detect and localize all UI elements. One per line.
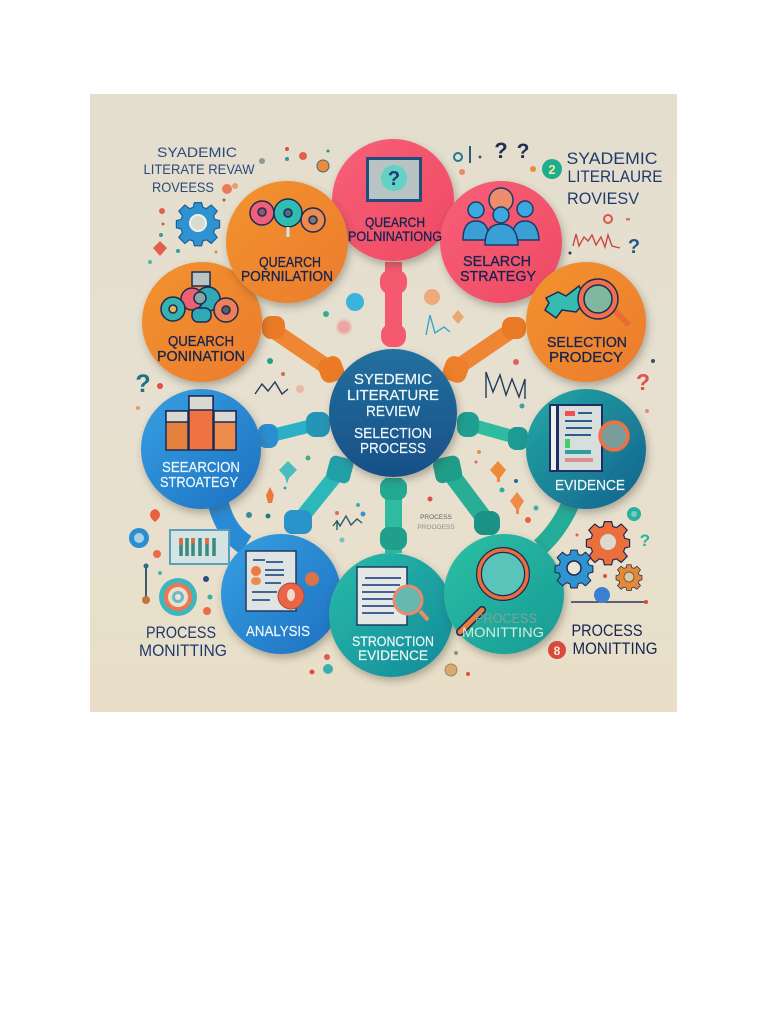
icon: question marks: ? xyxy=(640,531,650,550)
connector: upper right orange xyxy=(440,317,526,385)
label: SELECTION xyxy=(547,334,627,351)
heading: top left: SYADEMIC xyxy=(157,144,237,160)
scattered dots and markers xyxy=(136,146,655,676)
icon: team of people xyxy=(463,188,539,245)
label: STROATEGY xyxy=(160,475,238,491)
heading: top left xyxy=(144,144,255,195)
connector: lower left teal xyxy=(284,454,355,534)
heading: top left: ROVEESS xyxy=(152,179,214,195)
heading: process monitoring left xyxy=(139,624,227,660)
label xyxy=(460,253,536,285)
heading: process monitoring right: PROCESS xyxy=(572,622,642,640)
icon: question marks: ? xyxy=(628,236,640,258)
label: query formulation pink xyxy=(348,214,442,244)
caption: process small xyxy=(417,514,455,531)
icon: magnifying glass xyxy=(460,550,527,632)
label: PRODECY xyxy=(549,349,623,366)
label: STRATEGY xyxy=(460,268,536,285)
hub title xyxy=(347,372,439,457)
badge: number 8: 8 xyxy=(554,644,561,658)
heading: top right: SYADEMIC xyxy=(566,150,658,168)
icon: widget panel left xyxy=(170,530,229,564)
node: query formulation pink xyxy=(332,139,454,261)
label: SELARCH xyxy=(463,253,531,270)
label xyxy=(157,333,245,365)
caption: process small: PROOOESS xyxy=(417,524,455,531)
badge: number 2: 2 xyxy=(548,162,556,177)
icon: document with badge xyxy=(246,551,319,611)
label: EVIDENCE xyxy=(358,648,428,663)
hub title: SELECTION xyxy=(354,426,432,442)
node: search strategy pink xyxy=(440,181,562,303)
hub title: PROCESS xyxy=(360,441,426,457)
node: analysis blue xyxy=(221,534,341,654)
connector: teal arc to evidence xyxy=(540,505,570,547)
heading: top right: LITERLAURE xyxy=(568,168,662,186)
heading: top left: LITERATE REVAW xyxy=(144,161,255,177)
icon: screen with question mark: ? xyxy=(388,168,400,190)
label: PONINATION xyxy=(157,348,245,365)
icon: report with magnifier xyxy=(549,404,628,472)
heading: top right xyxy=(566,150,662,208)
connector: left blue xyxy=(258,412,330,448)
badge: number 8 xyxy=(548,641,566,659)
heading: top right: ROVIESV xyxy=(567,190,639,208)
node: evidence teal xyxy=(526,389,646,509)
central hub xyxy=(329,349,457,477)
connector: lower right teal xyxy=(432,454,500,535)
badge: number 2 xyxy=(542,159,562,179)
icon: hub of gears xyxy=(161,272,238,322)
label xyxy=(547,334,627,366)
label: query formulation pink: QUEARCH xyxy=(365,214,425,230)
hub title: REVIEW xyxy=(366,404,420,420)
connector: down teal xyxy=(380,478,407,553)
label: QUEARCH xyxy=(168,333,234,350)
node: search formulation orange xyxy=(226,181,348,303)
node: process monitoring teal xyxy=(444,534,564,654)
heading: process monitoring right xyxy=(572,622,658,658)
icon: target xyxy=(159,578,197,616)
label: STRONCTION xyxy=(352,634,434,649)
node: lower orange xyxy=(142,262,262,382)
heading: process monitoring right: MONITTING xyxy=(572,640,658,658)
label xyxy=(352,634,434,663)
label: query formulation pink: POLNINATIONG xyxy=(348,229,442,244)
caption: process small: PROCESS xyxy=(420,514,453,521)
icon: blue arrow button xyxy=(129,528,149,548)
icon: question marks: ? xyxy=(517,140,529,163)
label xyxy=(462,610,544,640)
node: search strategy blue xyxy=(141,389,261,509)
label xyxy=(241,254,333,285)
icon: question marks xyxy=(135,138,650,550)
hub title: SYEDEMIC xyxy=(354,372,432,388)
icon: question marks: ? xyxy=(636,369,650,395)
heading: process monitoring left: PROCESS xyxy=(146,624,216,642)
label: PROCESS xyxy=(475,610,537,626)
icon: document and magnifier xyxy=(357,567,428,625)
node: strong evidence teal xyxy=(329,553,453,677)
connector: top pink xyxy=(380,262,407,347)
icon: blue gear left xyxy=(176,203,220,246)
label: SEEARCION xyxy=(162,460,240,476)
icon: stacked databases xyxy=(166,396,236,450)
background panel xyxy=(90,94,677,712)
label: EVIDENCE xyxy=(555,478,625,494)
icon: three gears xyxy=(250,199,325,237)
heading: process monitoring left: MONITTING xyxy=(139,642,227,660)
label xyxy=(160,460,240,491)
icon: magnifier and puzzle xyxy=(545,279,629,325)
icon: gear cluster right xyxy=(555,522,648,604)
label: PORNILATION xyxy=(241,268,333,285)
label: MONITTING xyxy=(462,624,544,640)
icon: question marks: ? xyxy=(494,138,508,163)
icon: pin gauge xyxy=(142,564,150,604)
icon: question marks: ? xyxy=(135,370,151,398)
connector: upper left orange xyxy=(262,316,347,385)
icon: sparkline charts xyxy=(255,234,620,530)
label: ANALYSIS xyxy=(246,624,310,640)
connector: right teal xyxy=(457,412,528,450)
connector: blue arc to analysis xyxy=(218,503,246,545)
label: QUEARCH xyxy=(259,254,321,271)
node: selection process orange xyxy=(526,262,646,382)
hub title: LITERATURE xyxy=(347,388,439,404)
